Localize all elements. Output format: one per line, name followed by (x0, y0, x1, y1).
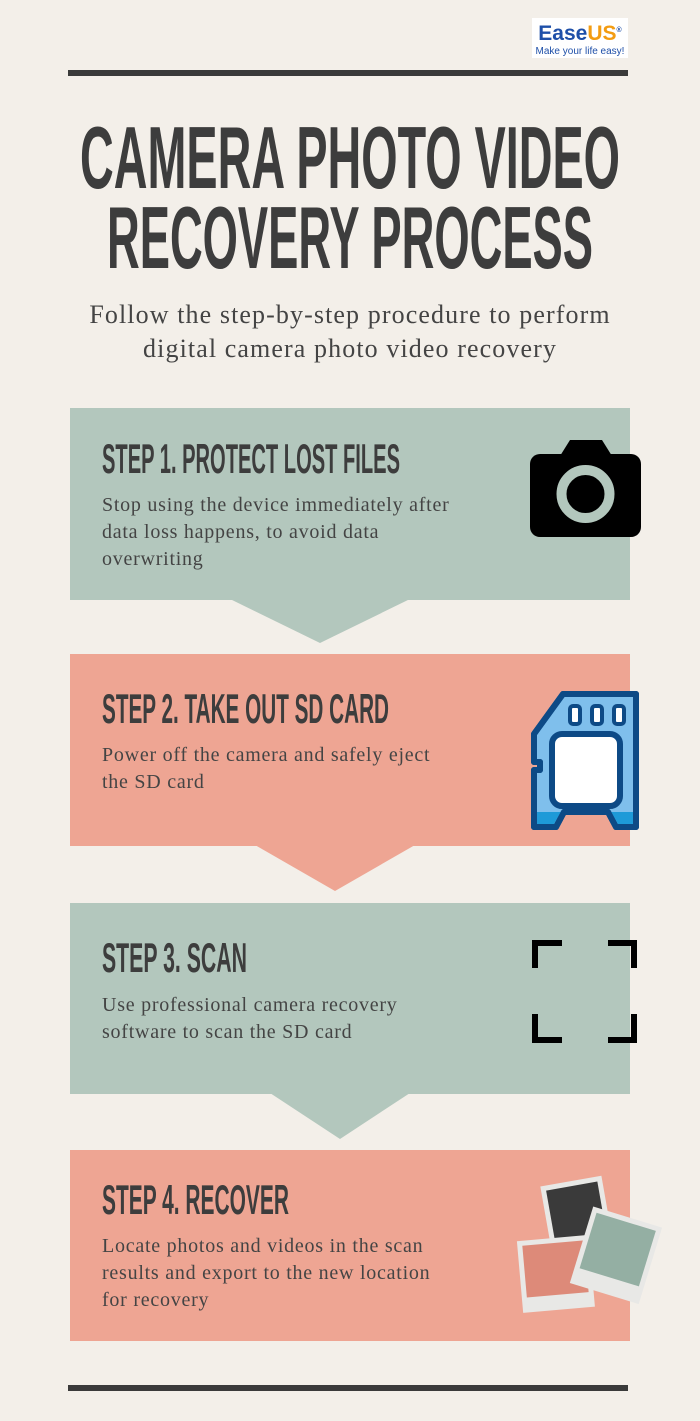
text: step 4: results and export to the new location (102, 1262, 430, 1284)
panel: step 2 (70, 654, 630, 846)
text: step 3: software to scan the SD card (102, 1021, 352, 1043)
logo: Make your life easy! (536, 46, 624, 57)
panel: step 3 (70, 903, 630, 1094)
icon: sd card (531, 691, 639, 830)
text: step 1 (102, 494, 450, 570)
icon: scan frame (532, 940, 637, 1043)
subtitle: Follow the step-by-step procedure to perform (89, 300, 611, 329)
logo: EaseUS® (538, 22, 622, 45)
text: step 1: overwriting (102, 548, 204, 570)
subtitle: digital camera photo video recovery (143, 334, 557, 363)
text: step 2 (102, 744, 430, 793)
text: step 4 (102, 1235, 430, 1311)
text: step 2: the SD card (102, 771, 205, 793)
text: step 1: data loss happens, to avoid data (102, 521, 379, 543)
text: step 3 (102, 994, 398, 1043)
icon: photos (517, 1176, 662, 1313)
subtitle (89, 300, 611, 363)
icon: camera (530, 440, 641, 537)
logo (532, 18, 628, 58)
panel: step 4 (70, 1150, 630, 1341)
text: step 3: Use professional camera recovery (102, 994, 398, 1016)
text: step 4: Locate photos and videos in the scan (102, 1235, 423, 1257)
text: step 1: Stop using the device immediately after (102, 494, 450, 516)
text: step 2: Power off the camera and safely eject (102, 744, 430, 766)
panel: step 1 (70, 408, 630, 600)
text: step 4: for recovery (102, 1289, 209, 1311)
title (80, 108, 620, 280)
